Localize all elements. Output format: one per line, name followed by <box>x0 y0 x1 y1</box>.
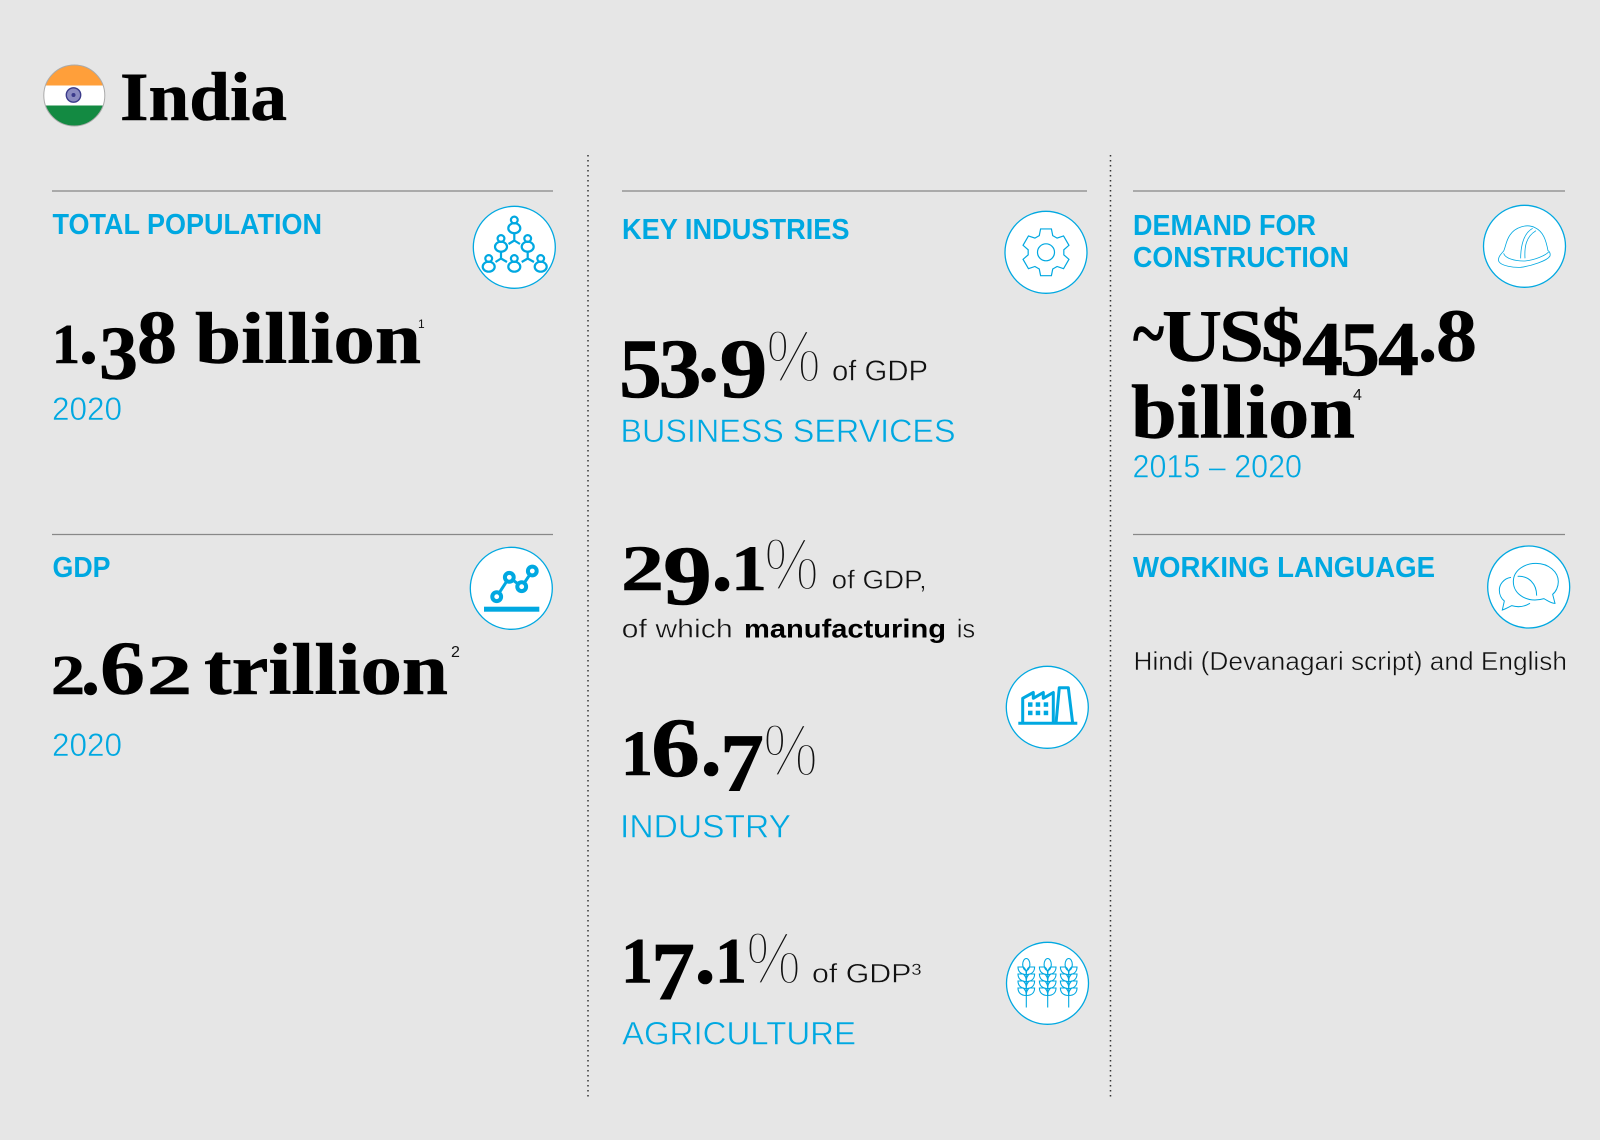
stat: 1.38 billion: 3 <box>99 312 138 396</box>
stat: 29.1 percent: 9 <box>663 529 712 623</box>
stat: US$454.8 billion: 4 <box>1302 306 1343 392</box>
stat: US$454.8 billion: S <box>1219 296 1264 378</box>
heading: demand for construction: DEMAND FOR <box>1133 210 1316 242</box>
stat: 1.38 billion: 1 <box>52 314 80 376</box>
text: of which manufacturing is: of which <box>622 614 733 644</box>
stat: 2.62 trillion: 6 <box>100 627 145 711</box>
footnote 4: 4 <box>1353 387 1362 404</box>
heading: total population: TOTAL POPULATION <box>52 209 322 241</box>
stat: 1.38 billion: 8 <box>137 296 177 380</box>
stat: 29.1 percent: . <box>712 515 733 609</box>
stat: 53.9 percent: 3 <box>658 322 702 416</box>
heading: demand for construction: CONSTRUCTION <box>1133 242 1349 274</box>
stat: US$454.8 billion: 5 <box>1340 306 1380 392</box>
footnote 1: 1 <box>418 317 425 331</box>
stat: US$454.8 billion: U <box>1162 296 1222 378</box>
stat: 2.62 trillion: 2 <box>147 645 192 707</box>
stat: US$454.8 billion: 8 <box>1436 295 1477 378</box>
heading: GDP: GDP <box>52 552 110 584</box>
icon: speech bubbles <box>1488 546 1570 628</box>
stat: 1.38 billion: billion <box>195 298 421 379</box>
stat: US$454.8 billion: 4 <box>1378 306 1419 392</box>
stat: 53.9 percent: 5 <box>619 322 662 416</box>
panel: working language <box>1133 546 1570 676</box>
panel: demand for construction <box>1131 205 1566 484</box>
icon: gear <box>1005 211 1087 293</box>
icon: line chart <box>470 547 552 629</box>
panel: GDP <box>51 547 552 763</box>
icon: population network <box>473 206 555 288</box>
stat: 17.1 percent: % <box>746 916 801 1000</box>
stat: 16.7 percent: 6 <box>651 701 700 795</box>
label: industry: INDUSTRY <box>620 808 791 844</box>
text: of GDP3: of GDP³ <box>812 959 922 989</box>
title: India <box>120 59 287 135</box>
text: of GDP: of GDP <box>832 356 928 388</box>
stat: 1.38 billion: . <box>79 296 98 380</box>
text: of GDP,: of GDP, <box>832 564 927 594</box>
stat: 16.7 percent: 1 <box>621 718 653 790</box>
year: 2020 <box>52 727 122 763</box>
stat: US$454.8 billion: $ <box>1261 296 1303 378</box>
stat: 53.9 percent: . <box>698 306 719 400</box>
stat: 29.1 percent: % <box>764 522 819 606</box>
years: 2015 – 2020 <box>1132 448 1302 484</box>
stat: 53.9 percent: 9 <box>720 322 768 416</box>
panel: total population <box>52 206 555 427</box>
text: languages: Hindi (Devanagari script) and English <box>1134 646 1567 676</box>
icon: factory <box>1006 666 1088 748</box>
stat: 17.1 percent: 1 <box>621 926 653 998</box>
stat: 29.1 percent: 2 <box>621 533 664 605</box>
stat: 2.62 trillion: 2 <box>51 645 85 707</box>
stat: 16.7 percent: 7 <box>720 717 764 809</box>
stat: 17.1 percent: . <box>694 908 716 1002</box>
text: of which manufacturing is: is <box>957 614 975 644</box>
icon: wheat <box>1006 942 1088 1024</box>
label: business services: BUSINESS SERVICES <box>620 413 956 449</box>
heading: working language: WORKING LANGUAGE <box>1133 552 1435 584</box>
text: of which manufacturing is: manufacturing <box>744 614 946 644</box>
icon: hard hat <box>1484 205 1566 287</box>
stat: 2.62 trillion: . <box>81 627 100 711</box>
heading: key industries: KEY INDUSTRIES <box>622 214 850 246</box>
year: 2020 <box>52 391 122 427</box>
stat: 16.7 percent: % <box>763 708 818 792</box>
stat: 29.1 percent: 1 <box>731 533 767 605</box>
stat: 53.9 percent: % <box>766 314 821 398</box>
label: agriculture: AGRICULTURE <box>622 1016 856 1052</box>
stat: US$454.8 billion: . <box>1418 292 1437 378</box>
stat: 17.1 percent: 1 <box>715 926 747 998</box>
stat: 16.7 percent: . <box>700 700 722 794</box>
stat: US$454.8 billion: billion <box>1131 371 1355 455</box>
footnote 2: 2 <box>451 644 460 661</box>
stat: US$454.8 billion: ~ <box>1133 293 1164 375</box>
stat: 2.62 trillion: trillion <box>204 629 448 710</box>
stat: 17.1 percent: 7 <box>651 925 695 1017</box>
panel: key industries <box>619 211 1088 1052</box>
icon: India flag <box>43 64 106 126</box>
